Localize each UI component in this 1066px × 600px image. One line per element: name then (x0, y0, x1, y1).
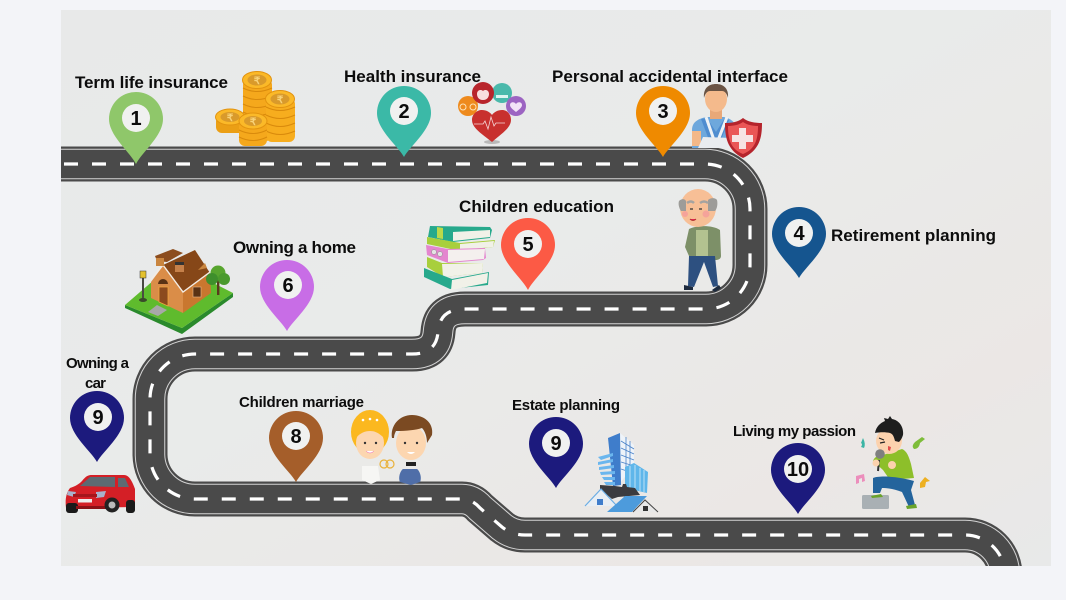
label: retirement planning: Retirement planning (831, 226, 996, 245)
pin 6: 6 (282, 275, 294, 297)
pin 4: 4 (793, 223, 805, 245)
label: personal accidental interface: Personal accidental interface (552, 67, 788, 86)
label: estate planning: Estate planning (512, 397, 620, 414)
pin 3: 3 (657, 101, 669, 123)
pin 9: estate: 9 (550, 433, 562, 455)
pin 6 (260, 260, 314, 331)
pin 5 (501, 218, 555, 290)
pin 9: car (70, 391, 124, 462)
label: owning a car: Owning a (66, 355, 130, 372)
label: health insurance: Health insurance (344, 67, 481, 86)
label: owning a home: Owning a home (233, 238, 356, 257)
pin 1 (109, 92, 163, 164)
pin 1: 1 (130, 108, 142, 130)
icon: singer with microphone (856, 416, 930, 509)
icon: red car (66, 475, 135, 513)
pin 5: 5 (522, 234, 534, 256)
pin 10: 10 (787, 459, 809, 481)
label: children education: Children education (459, 197, 614, 216)
pin 9: estate (529, 417, 583, 488)
pin 8: 8 (290, 426, 302, 448)
icon: red shield (725, 118, 762, 158)
label: term life insurance: Term life insurance (75, 73, 228, 92)
label: owning a car: car (85, 375, 106, 392)
winding road (55, 164, 1005, 575)
icon: rupee coins: ₹ (254, 76, 261, 87)
icon: rupee coins (216, 72, 295, 146)
icon: bride and groom (351, 410, 432, 485)
pin 10 (771, 443, 825, 514)
icon: rupee coins: ₹ (250, 117, 257, 128)
label: owning a car (66, 355, 130, 392)
pin 3 (636, 86, 690, 157)
icon: house on lawn (125, 249, 233, 334)
pin 4 (772, 207, 826, 278)
pin 2: 2 (398, 101, 410, 123)
icon: elderly man (679, 189, 721, 292)
label: children marriage: Children marriage (239, 394, 364, 411)
label: living my passion: Living my passion (733, 423, 856, 440)
pin 2 (377, 86, 431, 157)
icon: rupee coins: ₹ (277, 95, 284, 106)
icon: rupee coins: ₹ (227, 113, 234, 124)
pin 9: car: 9 (92, 407, 104, 429)
icon: city buildings and houses (585, 433, 658, 512)
icon: injured man (692, 84, 737, 148)
icon: stack of books (424, 226, 495, 290)
pin 8 (269, 411, 323, 482)
icon: health heart (458, 82, 526, 144)
